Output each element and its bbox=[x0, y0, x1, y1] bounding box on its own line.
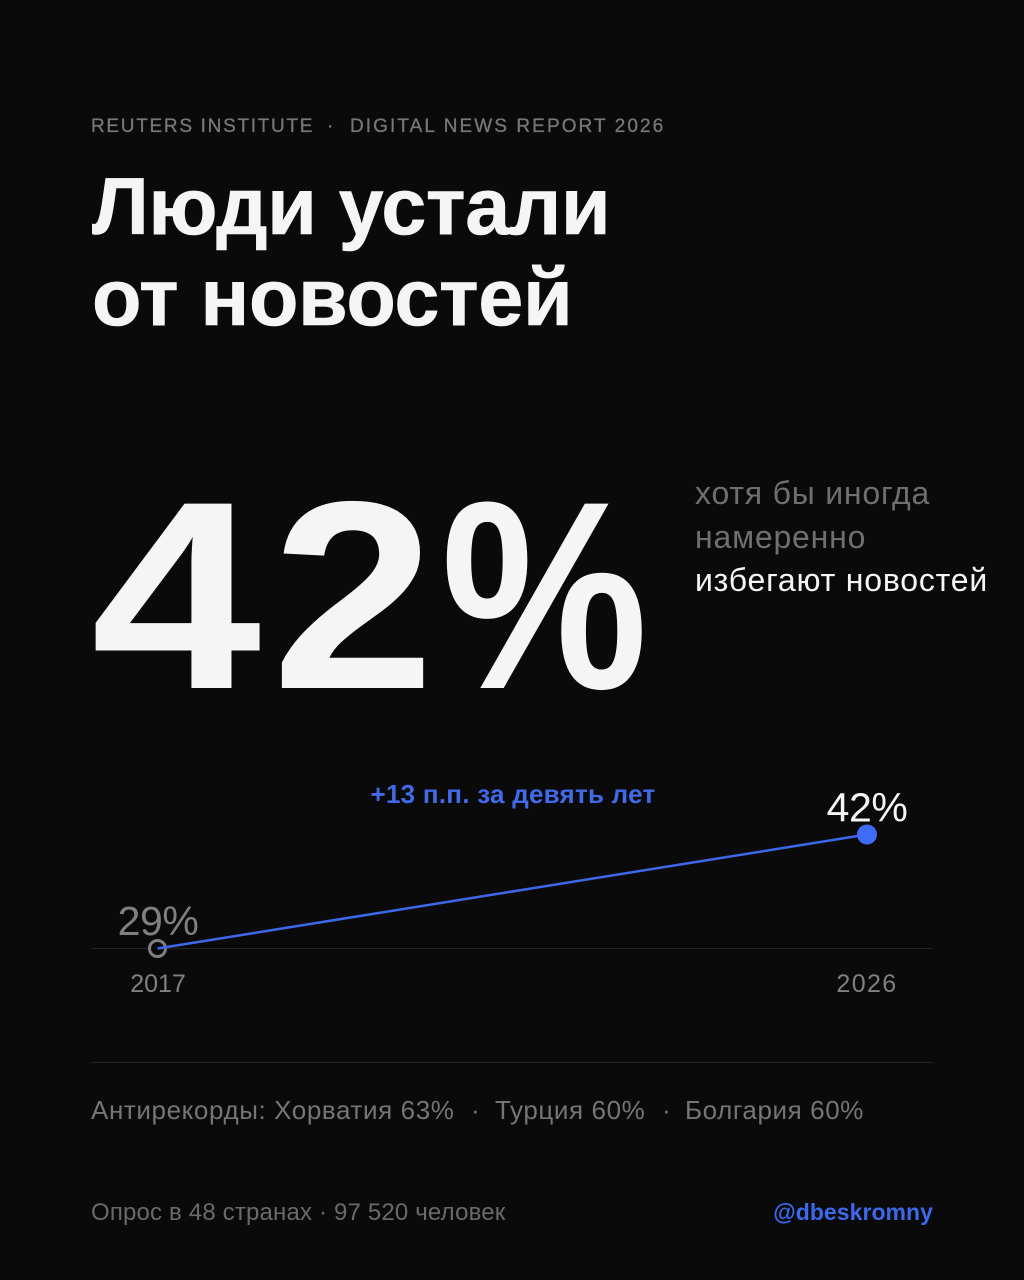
line chart: +13 п.п. за девять лет bbox=[371, 779, 655, 809]
anti-records: Антирекорды: Хорватия 63% bbox=[91, 1095, 454, 1125]
line chart bbox=[91, 779, 933, 998]
anti-records bbox=[91, 1095, 864, 1125]
anti-records: · bbox=[662, 1095, 671, 1125]
line chart: 42% bbox=[827, 784, 907, 830]
big number bbox=[91, 460, 648, 710]
big number caption: хотя бы иногда bbox=[695, 475, 930, 511]
footer divider bbox=[91, 1062, 933, 1063]
line chart: 2026 bbox=[836, 970, 898, 998]
eyebrow: source: REUTERS INSTITUTE bbox=[91, 116, 314, 137]
survey note: Опрос в 48 странах · 97 520 человек bbox=[91, 1199, 505, 1226]
line chart: 2017 bbox=[130, 970, 186, 998]
anti-records: Болгария 60% bbox=[685, 1095, 864, 1125]
big number caption: избегают новостей bbox=[695, 562, 988, 598]
title: от новостей bbox=[92, 253, 572, 343]
eyebrow: source: DIGITAL NEWS REPORT 2026 bbox=[350, 116, 665, 137]
big number caption bbox=[695, 475, 988, 598]
title bbox=[92, 162, 610, 343]
title: Люди устали bbox=[92, 162, 610, 252]
anti-records: · bbox=[471, 1095, 480, 1125]
big number caption: намеренно bbox=[695, 518, 866, 554]
anti-records: Турция 60% bbox=[495, 1095, 645, 1125]
eyebrow: source bbox=[91, 116, 665, 137]
author handle: @dbeskromny bbox=[773, 1199, 933, 1225]
eyebrow: source: · bbox=[327, 116, 333, 137]
line chart: 29% bbox=[118, 898, 198, 944]
